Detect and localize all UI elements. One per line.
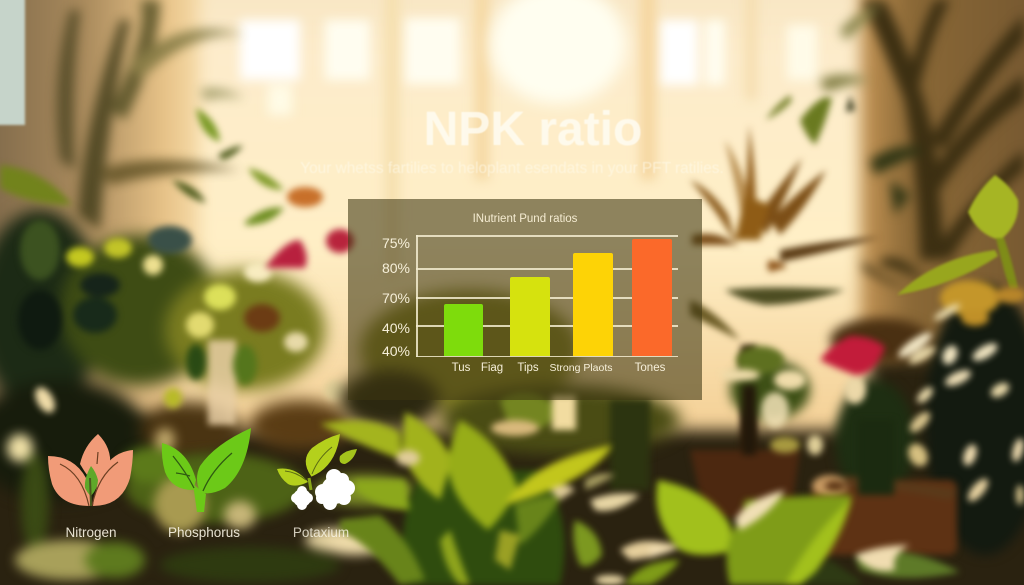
- icon: phosphorus: [162, 428, 251, 512]
- label: Potaxium: Potaxium: [293, 525, 349, 540]
- foreground leaves: [320, 412, 960, 585]
- upper right dark plant: [820, 0, 1024, 285]
- olive plant behind chart: [340, 290, 680, 455]
- x axis labels: Tus: [452, 362, 470, 374]
- y axis labels: 40%: [382, 320, 410, 336]
- centre-right spiky plant: [690, 95, 880, 460]
- right lower foliage: [730, 285, 1024, 555]
- pots: [690, 385, 958, 555]
- x axis labels: [452, 362, 665, 374]
- icon: nitrogen: [48, 434, 133, 506]
- bar: Tips: [510, 277, 550, 356]
- bar: Tus Fiag: [444, 304, 483, 356]
- label: Nitrogen: Nitrogen: [65, 525, 117, 540]
- y axis labels: 80%: [382, 260, 410, 276]
- bar chart: [416, 235, 678, 357]
- chart heading: INutrient Pund ratios: [473, 213, 577, 225]
- title: NPK ratio: [424, 103, 642, 156]
- right leaves: [897, 175, 1018, 295]
- y axis labels: 70%: [382, 290, 410, 306]
- subtitle: Your whetss fartilies to heloplant esendats in your PFT ratilies.: [300, 160, 724, 177]
- bar: Tones: [632, 239, 672, 356]
- upper left plant: [57, 0, 245, 230]
- x axis labels: Fiag: [481, 362, 503, 374]
- panel: bar chart: [348, 199, 702, 400]
- y axis labels: 75%: [382, 235, 410, 251]
- foreground left glows: [7, 428, 415, 583]
- y axis labels: 40%: [382, 343, 410, 359]
- x axis labels: Tones: [635, 362, 665, 374]
- left foliage mass: [0, 210, 350, 500]
- icon: potassium: [277, 434, 357, 510]
- walls and curtains: [0, 0, 1024, 430]
- bar: Strong Plaots: [573, 253, 613, 356]
- x axis labels: Tips: [517, 362, 539, 374]
- x axis labels: Strong Plaots: [549, 362, 613, 374]
- label: Phosphorus: Phosphorus: [168, 525, 240, 540]
- y axis labels: [382, 235, 410, 359]
